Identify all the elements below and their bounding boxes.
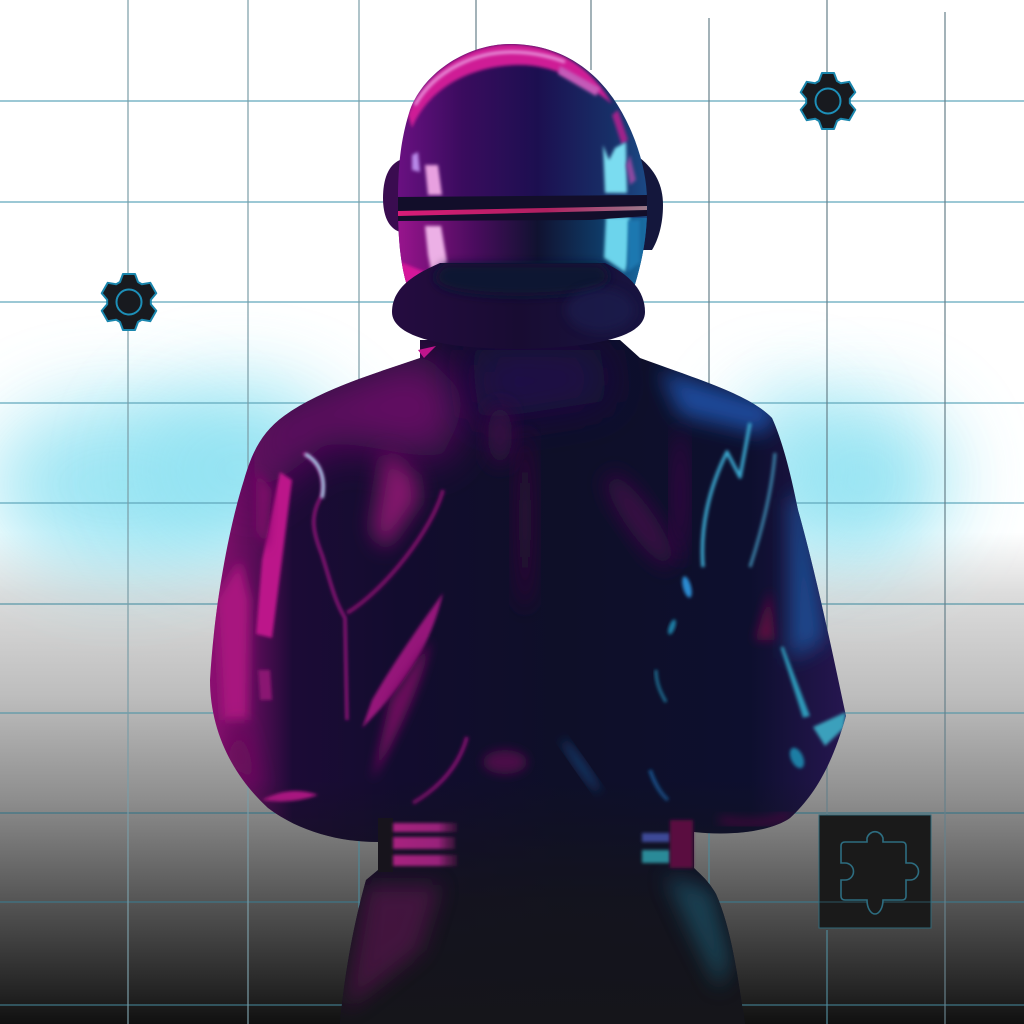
icon: gear right bbox=[801, 73, 855, 129]
neck collar bbox=[392, 263, 645, 358]
pink rim bbox=[408, 44, 612, 128]
visor band bbox=[398, 195, 647, 221]
belt bbox=[378, 818, 693, 872]
chest highlights bbox=[303, 405, 683, 803]
figure: jacket and trousers bbox=[200, 340, 860, 1024]
left reflections bbox=[425, 165, 442, 195]
helmet bbox=[383, 44, 663, 303]
icon: puzzle piece tile bbox=[819, 815, 931, 928]
visor light line bbox=[398, 206, 647, 216]
left sleeve highlights bbox=[216, 470, 318, 802]
right reflections bbox=[603, 142, 627, 193]
icon: gear left bbox=[102, 274, 156, 330]
ear pads bbox=[383, 158, 663, 250]
right sleeve highlights bbox=[559, 423, 846, 823]
trouser tints bbox=[345, 875, 730, 1010]
lower fade bbox=[262, 792, 792, 1024]
shoulder sheen bbox=[245, 350, 780, 510]
